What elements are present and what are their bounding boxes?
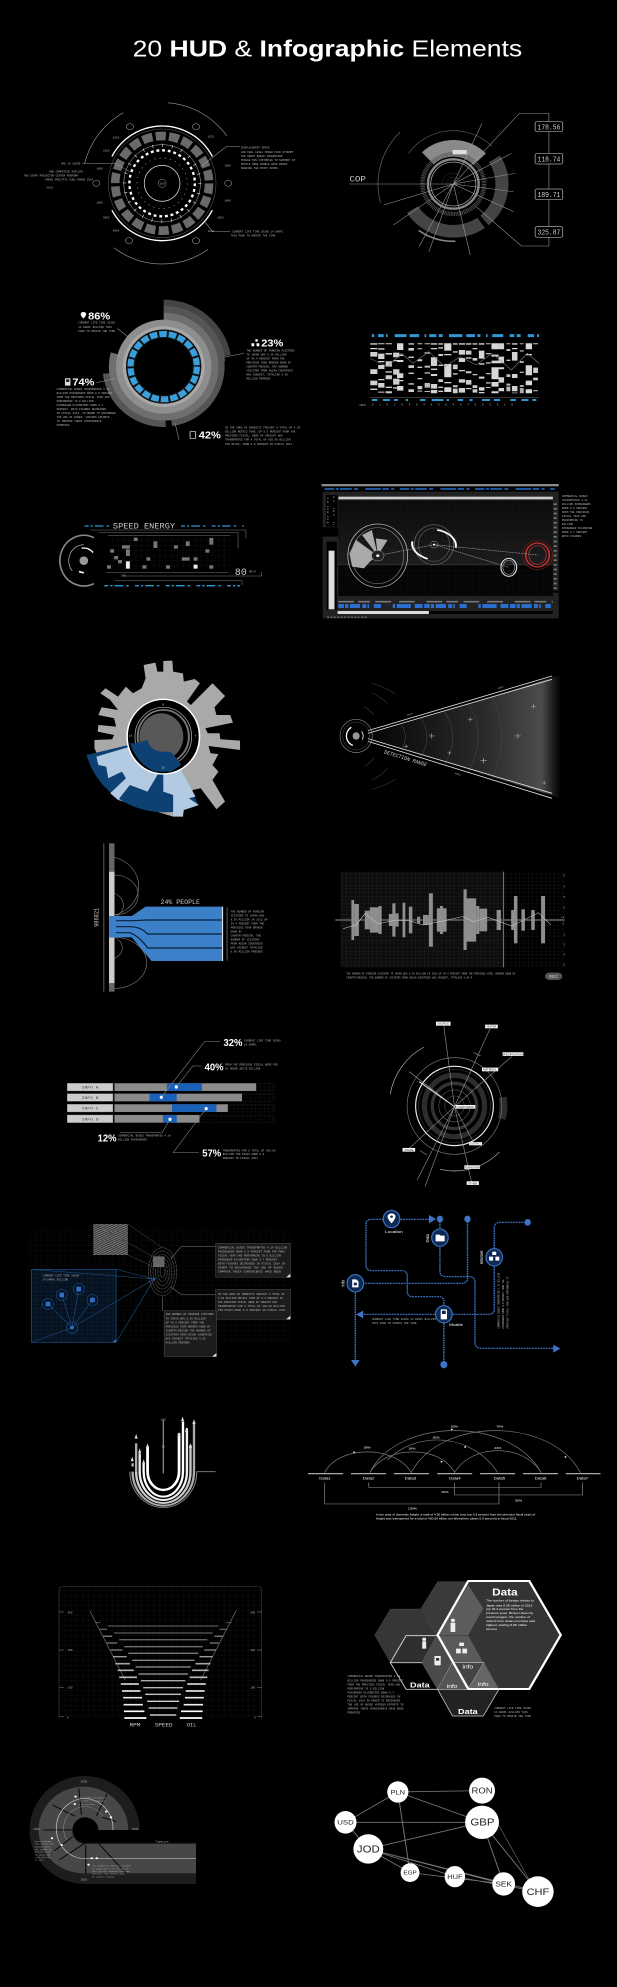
panel: blue ring percentage chart: TO IMPROVE THEIR CONVENIENCE xyxy=(57,420,102,423)
panel: COP radar dial with readouts: 178.56 xyxy=(538,123,560,132)
panel: blue ring percentage chart: IN THE AREA OF DOMESTIC FREIGHT A TOTAL OF 4.50 xyxy=(225,426,301,429)
panel: hexagon data cluster: PASSENGER KILOMETERS DOWN 0.7 xyxy=(347,1692,394,1695)
panel: arc relationship diagram: Data1 xyxy=(319,1476,332,1480)
fingerprint xyxy=(148,1248,177,1296)
panel: radial target with labels: TURNOVER xyxy=(464,1166,480,1169)
panel: blue ring percentage chart: TON MILES, DOWN 0.9 PERCENT IN FISCAL 2011 xyxy=(225,443,293,446)
panel: radar scanner dashboard xyxy=(321,484,593,620)
panel: arc relationship diagram xyxy=(308,1425,600,1520)
panel: radial target with labels: WATER xyxy=(487,1025,496,1029)
panel: info stacked bars: BILLION PASSENGERS xyxy=(118,1138,147,1141)
panel: info stacked bars: 12% xyxy=(98,1133,117,1144)
panel: funnel gauge RPM speed oil: 100 xyxy=(68,1687,73,1690)
panel: spiral timeline: BY COUNTRY REGION xyxy=(92,1875,115,1878)
panel: radial target with labels: SHARE xyxy=(404,1148,414,1152)
panel: arc relationship diagram: Data6 xyxy=(535,1476,547,1480)
panel: hexagon data cluster: BILLION PASSENGERS DOWN 0.9 PERCENT xyxy=(347,1679,404,1682)
panel: blue flow network: PREVIOUS FISCAL YEAR AND PERFORMING 79 xyxy=(506,1276,509,1328)
panel: 24% people flow chart: 986821 xyxy=(93,907,101,927)
panel: spiral timeline: 8.36 MILLION xyxy=(35,1856,51,1859)
panel: circular HUD dial: ONE COMPETIVE SUPLIGN xyxy=(49,171,83,174)
panel: currency network graph: CHF xyxy=(527,1888,549,1898)
panel: spiral timeline: FUEL SYSTEM FOR xyxy=(35,1843,55,1846)
panel: blue ring percentage chart: COMMERCIAL BUSES TRANSPORTED 4.14 xyxy=(57,388,110,391)
panel: info stacked bars: 10 HOUSE SELTE BILLION xyxy=(225,1067,261,1070)
panel: currency network graph: JOD xyxy=(357,1844,380,1855)
panel: 24% people flow chart: THE NUMBER OF FOREIGN xyxy=(231,910,265,913)
panel: COP radar dial with readouts: COP xyxy=(349,174,366,184)
panel: arc relationship diagram: freight was transported for a total of 420.80 billion ton-kilometers (down 0.9 percent) in fiscal 2011. xyxy=(376,1517,518,1520)
panel: speed energy gauge: 80 xyxy=(235,568,247,579)
panel: arc relationship diagram: In the area of domestic freight, a total of 4.50 billion metric tons (up 0.3 percent from the previous fiscal year) of xyxy=(376,1513,535,1516)
panel: 24% people flow chart: 24% PEOPLE xyxy=(161,899,200,907)
panel: radar scanner dashboard: >>>>>>>>>>>> xyxy=(327,616,368,620)
panel: info stacked bars: COMMERCIAL BUSES TRANSPORTED 4.14 xyxy=(118,1134,171,1137)
panel: U-shaped bar arcs: 100 xyxy=(161,1419,166,1422)
panel: currency network graph xyxy=(334,1778,554,1907)
fingerprint patch xyxy=(93,1224,128,1255)
panel: hexagon data cluster: FISCAL 2014 IN ORDER TO ENCOURAGE xyxy=(347,1700,401,1703)
panel: 24% people flow chart: COUNTRY/REGION, THE xyxy=(231,934,262,937)
panel: currency network graph: EGP xyxy=(403,1871,417,1876)
panel: blue flow network: CURRENT LIFE TIME 20360 14 DARPL BILLION xyxy=(372,1318,436,1321)
callout: foreign visitors: COUNTRY/REGION THE NUMBER OF xyxy=(166,1329,211,1332)
panel: info stacked bars: 14 DARPL xyxy=(244,1043,257,1046)
center speed bars xyxy=(108,1626,218,1715)
panel: currency network graph: HUF xyxy=(447,1874,463,1881)
panel: blue flow network: Data xyxy=(425,1234,430,1243)
panel: waveform chart: 2 xyxy=(563,907,566,910)
panel: spiral timeline xyxy=(30,1776,196,1884)
panel: speed energy gauge: SPEED ENERGY xyxy=(113,522,176,531)
panel: circular HUD dial: 0984 xyxy=(113,229,120,232)
callout: foreign visitors: TO JAPAN WAS 8.36 MILLION xyxy=(166,1317,206,1320)
panel: radial target with labels: OTHER xyxy=(468,1182,478,1185)
panel: hexagon data cluster: visitors from Asian countries was xyxy=(486,1619,536,1623)
panel: blue ring percentage chart: PAGE TO UPDATE THE TIME xyxy=(78,330,116,333)
panel: info stacked bars: PERCENT IN FISCAL 2011 xyxy=(223,1157,258,1160)
panel: radial target with labels xyxy=(364,1014,545,1198)
panel: radar scanner dashboard: BILLION xyxy=(562,523,574,526)
panel: blue ring percentage chart: BILLION PASSENGERS DOWN 0.9 PERCENT xyxy=(57,392,113,395)
callout: domestic freight: TRANSPORTED FOR A TOTAL OF 420.80 BILLION xyxy=(218,1305,285,1308)
panel: radar scanner dashboard: BOTH FIGURES xyxy=(562,535,582,538)
panel: circular HUD dial: 1056 xyxy=(217,217,224,220)
panel: spiral timeline: THE NUMBER OF FOREIGN VISITORS xyxy=(92,1865,132,1868)
panel: blue ring percentage chart: COUNTRY/REGION, THE NUMBER xyxy=(246,366,288,369)
panel: blue ring percentage chart: TRANSPORTED FOR A TOTAL OF 420.80 BILLION xyxy=(225,439,291,442)
panel: blue ring percentage chart: THE USE OF BUSES, VARIOUS EFFORTS xyxy=(57,416,110,419)
panel: spiral timeline: 2020 xyxy=(81,1879,88,1882)
panel: detection range cone: 50PX xyxy=(497,686,505,690)
panel: spiral timeline: TO JAPAN WAS 8.36 MILLION IN xyxy=(92,1867,129,1870)
panel: waveform chart: 3 xyxy=(563,896,566,899)
blue node box xyxy=(31,1269,154,1342)
panel: circular HUD dial: SPEED SPECIFIC FUEL RANGE 2014 xyxy=(45,179,94,182)
callout: commercial buses: PASSENGERS DOWN 0.9 PERCENT FROM THE PREV xyxy=(218,1251,285,1254)
panel: waveform chart: 4 xyxy=(563,953,566,956)
panel: blue flow network: Location xyxy=(385,1229,403,1234)
panel: 24% people flow chart: FROM ASIAN COUNTRIES xyxy=(231,942,263,945)
panel: blue ring percentage chart: 74% xyxy=(72,377,95,388)
panel: spiral timeline: THE NUMBER OF xyxy=(35,1848,52,1851)
panel: info stacked bars: INFO C xyxy=(82,1107,99,1111)
panel: waveform chart: REC xyxy=(549,974,558,980)
panel: blue ring percentage chart: CURRENT LIFE TIME 20360 xyxy=(78,322,116,325)
panel: waveform chart: THE NUMBER OF FOREIGN VISITORS TO JAPAN WAS 8.36 MILLION IN 2012 UP 34.4 PERCENT FROM THE PREVIOUS YEAR. BROKEN DOWN BY xyxy=(346,973,516,976)
panel: fingerprint scan analysis xyxy=(28,1224,291,1357)
panel: radial target with labels: SOURCE xyxy=(437,1022,449,1026)
panel: arc relationship diagram: 76% xyxy=(496,1425,503,1428)
callout: commercial buses: IMPROVE THEIR CONVENIENCE HAVE BEEN xyxy=(218,1271,282,1274)
panel: hexagon data cluster: PERFORMING 79.9 BILLION xyxy=(347,1688,385,1691)
panel: speed energy gauge: CHG xyxy=(121,575,127,578)
panel: spiral timeline: MODERN PARTS xyxy=(35,1845,51,1848)
panel: 24% people flow chart: 8.36 MILLION IN 2012 UP xyxy=(231,918,268,921)
panel: radial sunburst chart: 12 xyxy=(162,767,165,770)
panel: hexagon data cluster: (up 34.4 percent from the xyxy=(486,1607,524,1611)
callout: foreign visitors: MILLION PERSONS xyxy=(166,1341,190,1344)
callout: foreign visitors: VISITORS FROM ASIAN COUNTRIES xyxy=(166,1333,213,1336)
panel: waveform chart: 5 xyxy=(563,963,566,966)
panel: circular HUD dial: LOW FUEL LEVEL SPEED PAIR ATTEMPT xyxy=(241,151,294,154)
panel: detection range cone: DETECTION RANGE xyxy=(383,749,428,768)
panel: hexagon data cluster: Data xyxy=(458,1707,478,1716)
panel: funnel gauge RPM speed oil xyxy=(59,1587,262,1728)
dark blue sector xyxy=(87,737,199,812)
panel: arc relationship diagram: Data5 xyxy=(494,1476,506,1480)
panel: funnel gauge RPM speed oil: OIL xyxy=(187,1722,197,1728)
panel: waveform chart: -2 xyxy=(561,923,565,926)
panel: spiral timeline: TO JAPAN WAS xyxy=(35,1853,51,1856)
panel: radial target with labels: MATERIAL xyxy=(483,1068,497,1072)
panel: U-shaped bar arcs xyxy=(130,1417,216,1508)
panel: hexagon data cluster: PAGE TO UPDATE THE TIME xyxy=(494,1715,532,1718)
panel: COP radar dial with readouts: 118.74 xyxy=(538,155,560,164)
panel: speed energy gauge xyxy=(52,522,262,594)
panel: spiral timeline: 2012 UP 34.4 PERCENT FROM THE xyxy=(92,1870,131,1873)
panel: arc relationship diagram: 66% xyxy=(442,1490,449,1494)
callout: domestic freight: TON MILES DOWN 0.9 PERCENT IN FISCAL 2011 xyxy=(218,1309,286,1312)
panel: arc relationship diagram: Data7 xyxy=(577,1476,589,1480)
panel: waveform chart: COUNTRY/REGION, THE NUMBER OF VISITORS FROM ASIAN COUNTRIES WAS HIGHEST, TOTALING 6.06 M xyxy=(346,977,473,980)
panel: blue ring percentage chart: MILLION PERSONS xyxy=(246,378,271,381)
panel: blue ring percentage chart: PREVIOUS FISCAL, WERE OF FREIGHT WAS xyxy=(225,435,283,438)
panel: arc relationship diagram: Data4 xyxy=(449,1476,461,1480)
panel: radial sunburst chart xyxy=(87,661,240,817)
callout: commercial buses: PASSENGER-KILOMETERS DOWN 0.7 PERCENT xyxy=(218,1259,278,1262)
panel: funnel gauge RPM speed oil: SPEED xyxy=(155,1722,173,1728)
panel: radial target with labels: COMPONENT xyxy=(457,1105,475,1109)
panel: funnel gauge RPM speed oil: 800 xyxy=(250,1611,256,1614)
panel: radial sunburst chart: 6 xyxy=(195,735,197,738)
panel: hexagon data cluster: info xyxy=(447,1683,458,1690)
callout: domestic freight xyxy=(216,1289,290,1319)
panel: spiral timeline: 1990 xyxy=(132,1828,139,1831)
panel: waveform chart: 4 xyxy=(563,885,566,888)
panel: spiral timeline: VISITORS TO JAPAN WAS xyxy=(79,1800,107,1803)
side rpm and oil bars xyxy=(95,1623,232,1718)
panel: 24% people flow chart: WAS HIGHEST TOTALING xyxy=(231,946,263,949)
panel: funnel gauge RPM speed oil: 0 xyxy=(254,1716,256,1719)
panel: hexagon data cluster: info xyxy=(478,1681,489,1688)
title: 20 HUD & Infographic Elements xyxy=(133,37,522,62)
panel: hexagon data cluster: Japan was 8.36 million in 2012 xyxy=(486,1604,533,1607)
panel: info stacked bars xyxy=(67,1038,281,1160)
panel: blue ring percentage chart: VISITORS FROM ASIAN COUNTRIES xyxy=(246,370,293,373)
panel: circular HUD dial: THE SHORT BREAK INVERSIONS xyxy=(241,155,283,158)
panel: circular HUD dial: 180 xyxy=(160,182,165,185)
panel: data matrix with blue status rows xyxy=(359,336,539,407)
panel: data matrix with blue status rows: 01020304050607080910 xyxy=(372,404,519,407)
panel: blue flow network: THIS PAGE TO UPDATE THE TIME xyxy=(372,1322,417,1325)
panel: waveform chart: 5 xyxy=(563,875,566,878)
panel: blue flow network: Info xyxy=(340,1279,346,1287)
panel: circular HUD dial: CURRENT LIFE TIME 20360 14 DARPL xyxy=(232,230,284,233)
panel: blue flow network: PASSENGERS DOWN 0.9 PERCENT FROM THE xyxy=(502,1279,505,1328)
panel: hexagon data cluster: previous year). Broken down by xyxy=(486,1611,534,1615)
panel: blue ring percentage chart: PERFORMING 79.9 BILLION xyxy=(57,400,94,403)
panel: radial target with labels: OUTPUT xyxy=(470,1142,481,1146)
panel: blue ring percentage chart: THE NUMBER OF FOREIGN VISITORS xyxy=(246,350,295,353)
panel: circular HUD dial: 0992 xyxy=(103,217,110,220)
panel: info stacked bars: INFO B xyxy=(82,1096,99,1101)
panel: 24% people flow chart: NUMBER OF VISITORS xyxy=(231,938,260,941)
panel: blue ring percentage chart: 23% xyxy=(261,338,284,349)
panel: arc relationship diagram: 60% xyxy=(451,1425,458,1428)
panel: info stacked bars: 32% xyxy=(224,1038,243,1049)
panel: blue flow network: COMMERCIAL BUSES TRANSPORTED 4.14 BILLION xyxy=(498,1272,501,1328)
panel: radial sunburst chart: 18 xyxy=(129,735,133,738)
callout: commercial buses: ORDER TO ENCOURAGE THE USE OF BUSES xyxy=(218,1267,284,1270)
panel: radial sunburst chart: 0 xyxy=(163,703,165,706)
panel: detection range cone xyxy=(340,675,561,798)
panel: funnel gauge RPM speed oil: 400 xyxy=(68,1649,73,1652)
panel: circular HUD dial: VALU xyxy=(46,187,53,190)
panel: 24% people flow chart: 34.4 PERCENT FROM THE xyxy=(231,922,265,925)
panel: info stacked bars: TRANSPORTED FOR A TOTAL OF 420.80 xyxy=(223,1149,276,1152)
panel: radial target with labels: SPECIFICATION xyxy=(502,1053,523,1056)
panel: circular HUD dial: 1016 xyxy=(103,150,110,153)
panel: hexagon data cluster: THE USE OF BUSES VARIOUS EFFORTS TO xyxy=(347,1704,404,1707)
panel: hexagon data cluster: Data xyxy=(492,1587,519,1598)
panel: currency network graph: GBP xyxy=(470,1817,494,1828)
panel: funnel gauge RPM speed oil: 800 xyxy=(68,1611,73,1614)
panel: arc relationship diagram: 56% xyxy=(515,1499,522,1502)
panel: hexagon data cluster: highest, totaling 6.06 million xyxy=(486,1623,527,1627)
panel: U-shaped bar arcs: 50 xyxy=(162,1446,165,1449)
panel: spiral timeline: IN 2012 xyxy=(35,1859,45,1862)
panel: hexagon data cluster: PERCENT BOTH FIGURES DECREASED IN xyxy=(347,1696,401,1699)
light blue sector bars xyxy=(96,737,199,817)
panel: currency network graph: PLN xyxy=(391,1790,405,1796)
panel: radar scanner dashboard: PASSENGER KILOMETER xyxy=(562,527,593,530)
panel: blue ring percentage chart: 42% xyxy=(199,430,221,441)
panel: blue ring percentage chart xyxy=(57,303,301,446)
panel: blue flow network: Mobile xyxy=(449,1322,464,1327)
panel: info stacked bars: 57% xyxy=(202,1148,222,1159)
panel: radar scanner dashboard: FROM THE PREVIOUS xyxy=(562,511,590,514)
panel: arc relationship diagram: Data2 xyxy=(363,1476,375,1480)
panel: spiral timeline: WITH STANDARD xyxy=(35,1840,52,1843)
panel: circular HUD dial: 1000 xyxy=(96,202,103,205)
blue node box: 14 DARPL BILLION xyxy=(42,1278,69,1281)
panel: arc relationship diagram: 100% xyxy=(408,1507,417,1511)
panel: 24% people flow chart: DOWN BY xyxy=(231,930,242,933)
panel: COP radar dial with readouts xyxy=(349,94,563,274)
panel: hexagon data cluster: The number of foreign visitors to xyxy=(486,1599,534,1603)
panel: speed energy gauge: KM/H xyxy=(249,570,256,573)
panel: arc relationship diagram: 18% xyxy=(408,1447,416,1451)
callout: foreign visitors: PREVIOUS YEAR BROKEN DOWN BY xyxy=(166,1325,211,1328)
callout: foreign visitors: WAS HIGHEST TOTALING 6.06 xyxy=(166,1337,206,1340)
panel: circular HUD dial: TROUGH PAN CUSTOMIZE TO SUPPORT IN xyxy=(241,159,296,162)
panel: spiral timeline: THE NUMBER OF FOREIGN xyxy=(79,1796,107,1799)
panel: blue ring percentage chart: 86% xyxy=(88,311,111,322)
callout: foreign visitors xyxy=(164,1311,216,1357)
panel: radar scanner dashboard: DOWN 0.7 PERCENT xyxy=(562,531,588,534)
panel: circular HUD dial: 1032 xyxy=(208,136,215,139)
panel: currency network graph: RON xyxy=(472,1786,493,1795)
panel: info stacked bars: 40% xyxy=(205,1062,224,1073)
panel: hexagon data cluster: COMMERCIAL BUSES TRANSPORTED 4.14 xyxy=(347,1675,401,1678)
panel: circular HUD dial: 1048 xyxy=(224,200,231,203)
panel: radar scanner dashboard: TRANSPORTED 4.14 xyxy=(562,499,588,502)
panel: radar scanner dashboard: BILLION PASSENGERS xyxy=(562,503,591,506)
panel: blue ring percentage chart: BILLION METRIC TONS, UP 0.3 PERCENT FROM THE xyxy=(225,431,296,434)
panel: blue flow network xyxy=(340,1210,560,1368)
panel: spiral timeline: 2000 xyxy=(81,1781,88,1784)
panel: arc relationship diagram: Data3 xyxy=(405,1476,417,1480)
panel: detection range cone: 10PX xyxy=(407,712,414,717)
panel: blue flow network: Internet xyxy=(479,1250,484,1264)
callout: foreign visitors: UP 34.4 PERCENT FROM THE xyxy=(166,1321,205,1324)
callout: commercial buses: FISCAL YEAR AND PERFORMING 79.9 BILLION xyxy=(218,1255,282,1258)
panel: circular HUD dial: SPOTLE FREE DOUBLE WAVE BASES xyxy=(241,163,288,166)
panel: data matrix with blue status rows: INFO xyxy=(359,404,366,407)
panel: circular HUD dial: 1040 xyxy=(224,164,231,167)
panel: spiral timeline: 8.36 MILLION xyxy=(79,1803,95,1806)
panel: hexagon data cluster xyxy=(347,1581,561,1718)
panel: spiral timeline: FOREIGN VISITORS xyxy=(35,1851,56,1854)
panel: circular HUD dial: SHARING THE POINT SCOPE xyxy=(241,167,278,170)
panel: circular HUD dial: 1064 xyxy=(208,230,215,233)
panel: radar scanner dashboard: COMMERCIAL BUSES xyxy=(562,495,588,498)
panel: waveform chart: 2 xyxy=(563,933,566,936)
panel: spiral timeline: PREVIOUS YEAR BROKEN DOWN xyxy=(92,1873,125,1876)
panel: info stacked bars: FROM THE PREVIOUS FISCAL WERE FRE xyxy=(225,1063,278,1066)
panel: blue ring percentage chart: PERCENT. BOTH FIGURES DECREASED xyxy=(57,408,107,411)
panel: info stacked bars: BILLION TON MILES DOWN 0.9 xyxy=(223,1153,265,1156)
panel: arc relationship diagram: 28% xyxy=(364,1446,371,1450)
panel: funnel gauge RPM speed oil: 400 xyxy=(250,1649,256,1652)
panel: 24% people flow chart: PREVIOUS YEAR BROKEN xyxy=(231,926,263,929)
panel: blue ring percentage chart: IN FISCAL 2014. IN ORDER TO ENCOURAGE xyxy=(57,412,116,415)
panel: blue ring percentage chart: 14 DARPL BILLION THIS xyxy=(78,326,112,329)
panel: hexagon data cluster: persons. xyxy=(486,1627,498,1631)
blue node box: CURRENT LIFE TIME 20360 xyxy=(42,1274,80,1277)
panel: hexagon data cluster: 14 DARPL BILLION THIS xyxy=(494,1711,528,1714)
panel: radar scanner dashboard: FISCAL YEAR AND xyxy=(562,515,586,518)
panel: blue ring percentage chart: FROM THE PREVIOUS FISCAL YEAR AND xyxy=(57,396,110,399)
panel: funnel gauge RPM speed oil: 0 xyxy=(67,1716,69,1719)
panel: spiral timeline: TimeLine xyxy=(156,1841,169,1844)
panel: funnel gauge RPM speed oil: RPM xyxy=(129,1722,141,1728)
panel: radar scanner dashboard: PERFORMING 79 xyxy=(562,519,583,522)
panel: COP radar dial with readouts: 325.87 xyxy=(538,228,560,237)
callout: commercial buses: BOTH FIGURES DECREASED IN FISCAL 2014 IN xyxy=(218,1263,285,1266)
panel: waveform chart xyxy=(335,872,566,980)
panel: info stacked bars: INFO D xyxy=(82,1118,99,1122)
panel: radar scanner dashboard: DOWN 0.9 PERCENT xyxy=(562,507,588,510)
panel: circular HUD dial: DISPLACEMENT SPACE xyxy=(241,147,270,150)
panel: funnel gauge RPM speed oil: 100 xyxy=(250,1687,256,1690)
panel: info stacked bars: CURRENT LIFE TIME 20360 xyxy=(244,1039,281,1042)
panel: 24% people flow chart xyxy=(93,843,268,992)
panel: hexagon data cluster: info xyxy=(462,1664,474,1670)
panel: arc relationship diagram: 23% xyxy=(494,1446,501,1450)
panel: waveform chart: 3 xyxy=(563,943,566,946)
panel: COP radar dial with readouts: 189.71 xyxy=(538,191,560,200)
panel: circular HUD dial: 1008 xyxy=(96,167,103,170)
callout: commercial buses xyxy=(216,1243,290,1277)
callout: foreign visitors: THE NUMBER OF FOREIGN VISITORS xyxy=(166,1313,214,1316)
callout: domestic freight: IN THE AREA OF DOMESTIC FREIGHT A TOTAL OF xyxy=(218,1293,285,1296)
panel: info stacked bars: INFO A xyxy=(82,1086,99,1090)
panel: blue ring percentage chart: TO JAPAN WAS 8.36 MILLION xyxy=(246,354,287,357)
panel: blue ring percentage chart: PROMOTED xyxy=(57,424,70,427)
panel: blue ring percentage chart: PREVIOUS YEAR BROKEN DOWN BY xyxy=(246,362,292,365)
panel: arc relationship diagram: 36% xyxy=(432,1436,440,1440)
panel: circular HUD dial xyxy=(24,71,296,296)
panel: blue ring percentage chart: UP 34.4 PERCENT FROM THE xyxy=(246,358,285,361)
panel: blue ring percentage chart: PASSENGER-KILOMETERS DOWN 0.7 xyxy=(57,404,104,407)
panel: detection range cone: 30PX xyxy=(454,772,462,777)
panel: hexagon data cluster: FROM THE PREVIOUS FISCAL YEAR AND xyxy=(347,1684,401,1687)
panel: circular HUD dial: SPE 16 15000 xyxy=(61,163,81,166)
panel: blue ring percentage chart: WAS HIGHEST, TOTALING 6.06 xyxy=(246,374,288,377)
callout: domestic freight: THE PREVIOUS FISCAL WERE OF FREIGHT WAS xyxy=(218,1301,278,1304)
panel: 24% people flow chart: VISITORS TO JAPAN WAS xyxy=(231,914,265,917)
panel: hexagon data cluster: PROMOTED xyxy=(347,1712,361,1715)
panel: circular HUD dial: 1024 xyxy=(113,136,120,139)
panel: waveform chart: +2 xyxy=(561,916,565,919)
panel: spiral timeline: 2010 xyxy=(33,1828,40,1831)
callout: commercial buses: COMMERCIAL BUSES TRANSPORTED 4.14 BILLION xyxy=(218,1247,288,1250)
panel: hexagon data cluster: IMPROVE THEIR CONVENIENCE HAVE BEEN xyxy=(347,1708,404,1711)
panel: hexagon data cluster: CURRENT LIFE TIME 20360 xyxy=(494,1707,532,1710)
panel: hexagon data cluster: Data xyxy=(410,1680,430,1689)
panel: circular HUD dial: THIS PAGE TO UPDATE THE TIME xyxy=(231,234,276,237)
panel: 24% people flow chart: 6.06 MILLION PERSONS xyxy=(231,950,263,953)
panel: currency network graph: USD xyxy=(337,1818,354,1826)
panel: currency network graph: SEK xyxy=(495,1880,513,1888)
panel: hexagon data cluster: country/region, the number of xyxy=(486,1615,530,1619)
callout: domestic freight: 4.50 BILLION METRIC TONS UP 0.3 PERCENT FR xyxy=(218,1297,283,1300)
panel: circular HUD dial: TWO STORY PROJECTOR CENTER PERFORM xyxy=(24,175,79,178)
